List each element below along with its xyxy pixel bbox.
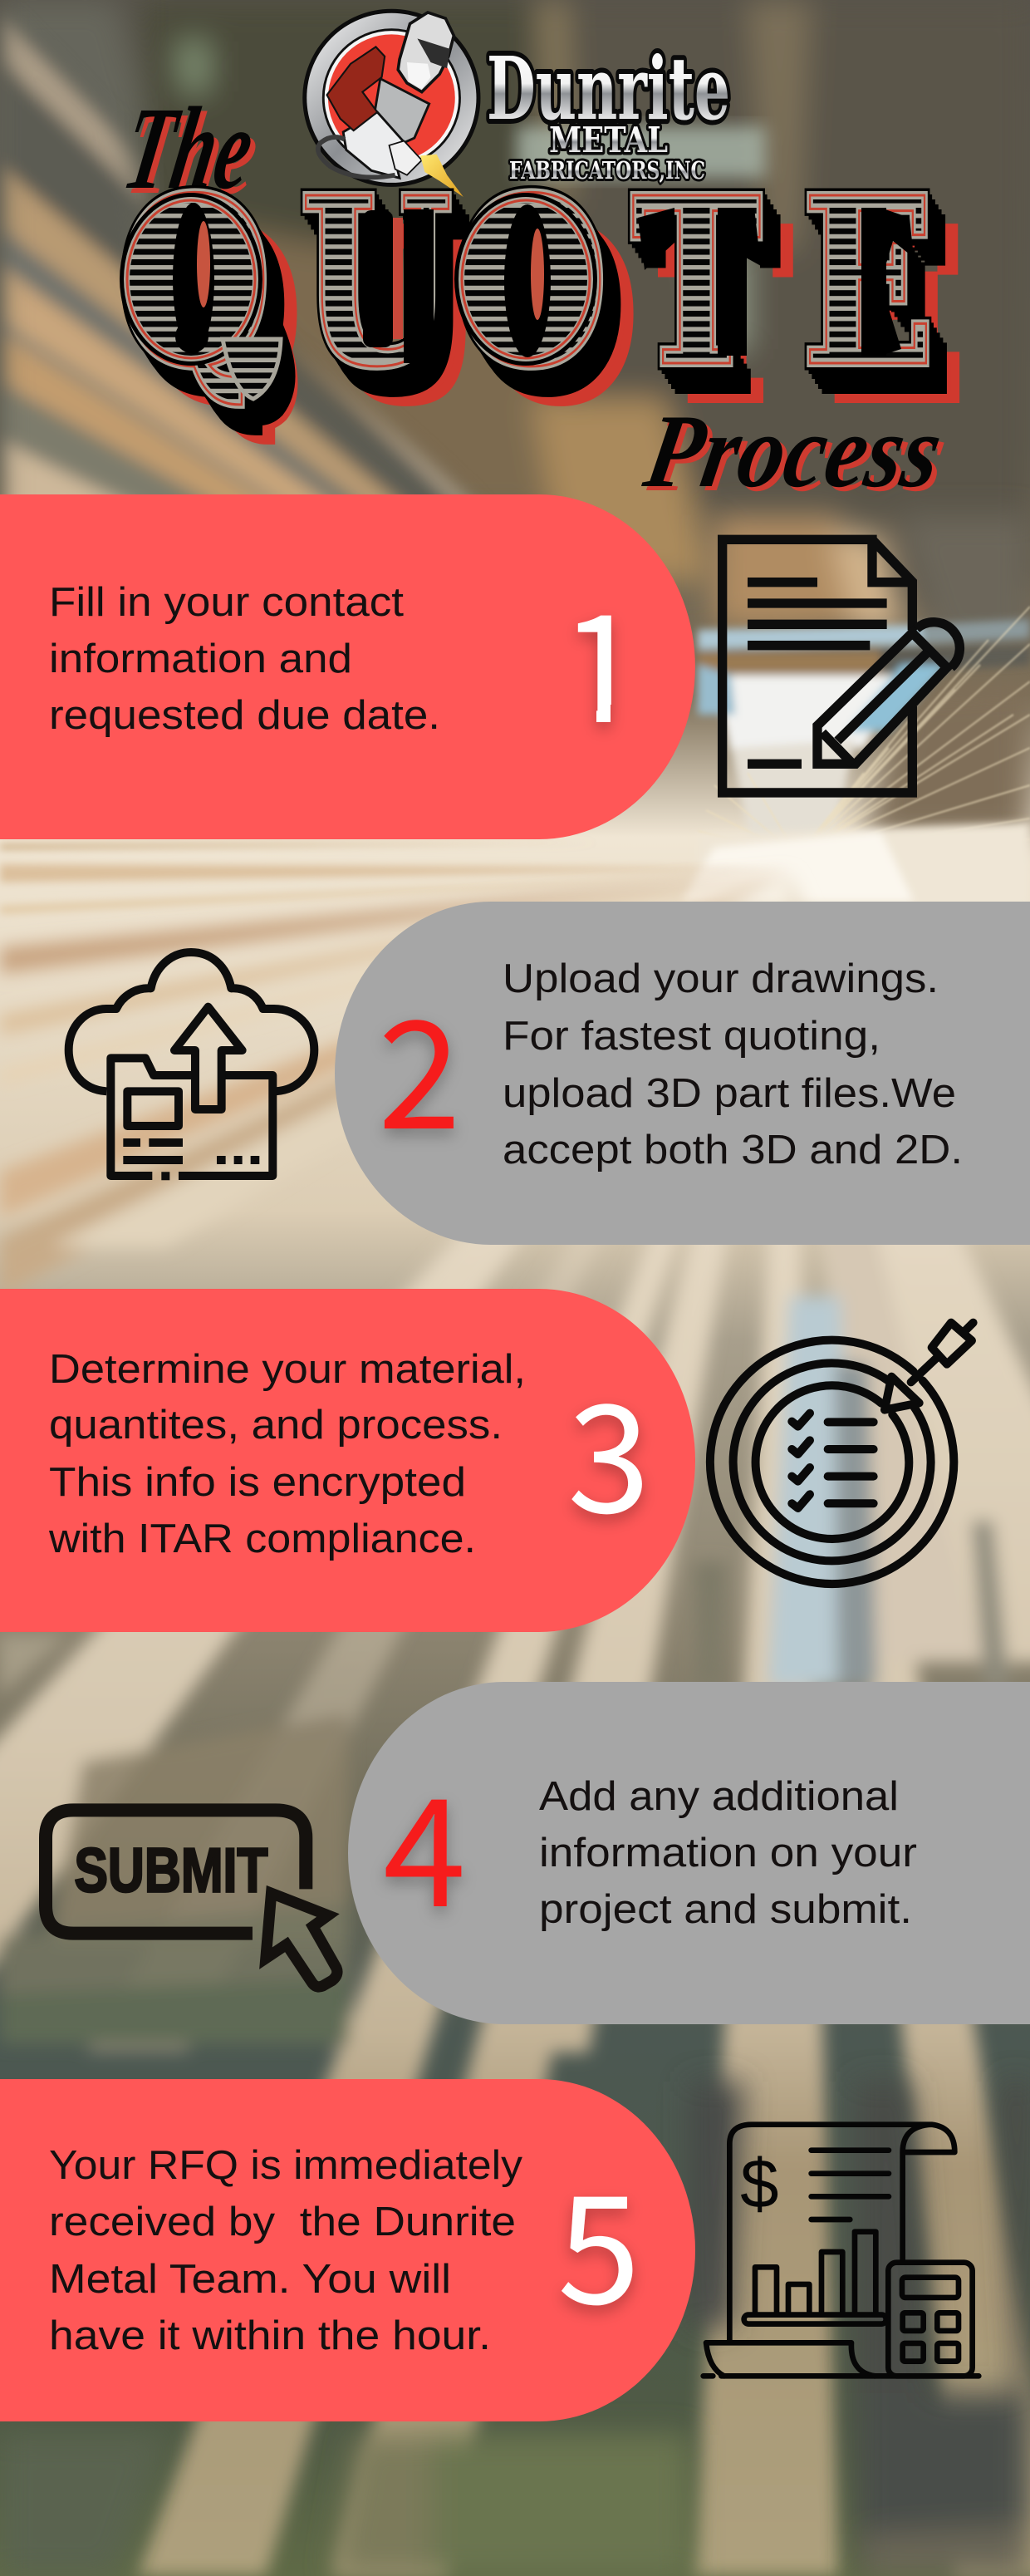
QUOTE black extrusion: QUOTE <box>135 173 951 443</box>
light rays fanning down <box>0 873 789 2052</box>
step 4 text: information on your <box>539 1831 917 1875</box>
step 4 number: 4 <box>383 1733 466 1949</box>
step 2 text: For fastest quoting, <box>503 1014 880 1059</box>
logo wordmark Dunrite: Dunrite <box>487 37 730 140</box>
step 4 text: Add any additional <box>539 1774 899 1819</box>
title word: The: The <box>115 82 262 214</box>
step 5 text: received by the Dunrite <box>49 2200 516 2244</box>
step 4 pill <box>348 1682 1030 2024</box>
step 2 text: accept both 3D and 2D. <box>503 1128 963 1172</box>
panel: step 1 <box>0 494 959 839</box>
step 5 text <box>49 2143 523 2358</box>
U inner stem <box>363 209 434 363</box>
E inner stem <box>861 208 914 356</box>
icon: invoice with chart and calculator: $ <box>740 2146 778 2223</box>
QUOTE striped front face: QUOTE <box>119 148 935 418</box>
QUOTE striped front face: QUOTE <box>119 148 935 418</box>
step 3 text: with ITAR compliance. <box>48 1517 476 1561</box>
panel: step 5 <box>0 2079 978 2421</box>
step 2 text <box>503 956 963 1172</box>
O front face and inner stem <box>454 193 597 366</box>
icon: target checklist with dart <box>710 1323 974 1584</box>
logo wordmark METAL: METAL <box>549 120 668 160</box>
step 5 text: Your RFQ is immediately <box>49 2143 523 2188</box>
QUOTE black extrusion: QUOTE <box>122 153 938 423</box>
icon: cloud upload folder <box>69 952 314 1176</box>
step 4 text <box>539 1774 917 1932</box>
panel: step 4 <box>46 1682 1030 2024</box>
QUOTE black extrusion: QUOTE <box>125 158 941 428</box>
logo emblem: welder in circle <box>302 9 480 197</box>
QUOTE striped front face: QUOTE <box>119 148 935 418</box>
panel: step 2 <box>69 902 1030 1245</box>
title word: Process: Process <box>641 398 955 514</box>
step 5 text: Metal Team. You will <box>49 2257 451 2302</box>
step 5 number: 5 <box>557 2130 640 2347</box>
QUOTE red shadow: QUOTE <box>148 182 964 452</box>
step 1 pill <box>0 494 695 839</box>
step 3 text <box>48 1347 526 1561</box>
step 4 text: project and submit. <box>539 1887 912 1932</box>
logo backing glow <box>517 126 766 178</box>
logo: Dunrite Metal Fabricators <box>302 9 766 197</box>
title word: QUOTE <box>119 148 964 452</box>
step 5 text: have it within the hour. <box>49 2313 491 2358</box>
step 1 text: requested due date. <box>49 693 440 738</box>
title word: The: The <box>120 87 267 219</box>
icon: submit button with cursor: SUBMIT <box>74 1836 268 1905</box>
Q front face and inner stem <box>120 193 281 399</box>
step 1 text: Fill in your contact <box>49 580 404 625</box>
T inner stem <box>638 208 761 356</box>
title word: The <box>115 82 267 219</box>
step 3 pill <box>0 1289 695 1632</box>
step 3 text: This info is encrypted <box>49 1460 466 1505</box>
step 3 number: 3 <box>567 1339 650 1556</box>
icon: submit button with cursor <box>46 1810 337 1987</box>
icon: invoice with chart and calculator <box>704 2125 978 2376</box>
step 1 text: information and <box>49 637 352 681</box>
step 3 text: Determine your material, <box>49 1347 526 1392</box>
icon: document with pencil <box>723 539 959 793</box>
step 2 text: upload 3D part files.We <box>503 1071 956 1116</box>
QUOTE striped front face: QUOTE <box>119 148 935 418</box>
logo wordmark Fabricators: FABRICATORS,INC <box>509 156 705 184</box>
title word: Process: Process <box>636 394 950 509</box>
step 3 text: quantites, and process. <box>49 1403 503 1448</box>
step 5 pill <box>0 2079 695 2421</box>
QUOTE black extrusion: QUOTE <box>131 168 948 438</box>
step 1 text <box>49 580 440 738</box>
step 2 text: Upload your drawings. <box>503 956 939 1001</box>
QUOTE black extrusion: QUOTE <box>128 163 944 433</box>
step 2 pill <box>335 902 1030 1245</box>
step 2 number: 2 <box>378 955 461 1172</box>
step 1 number: 1 <box>560 548 643 765</box>
panel: step 3 <box>0 1289 974 1632</box>
